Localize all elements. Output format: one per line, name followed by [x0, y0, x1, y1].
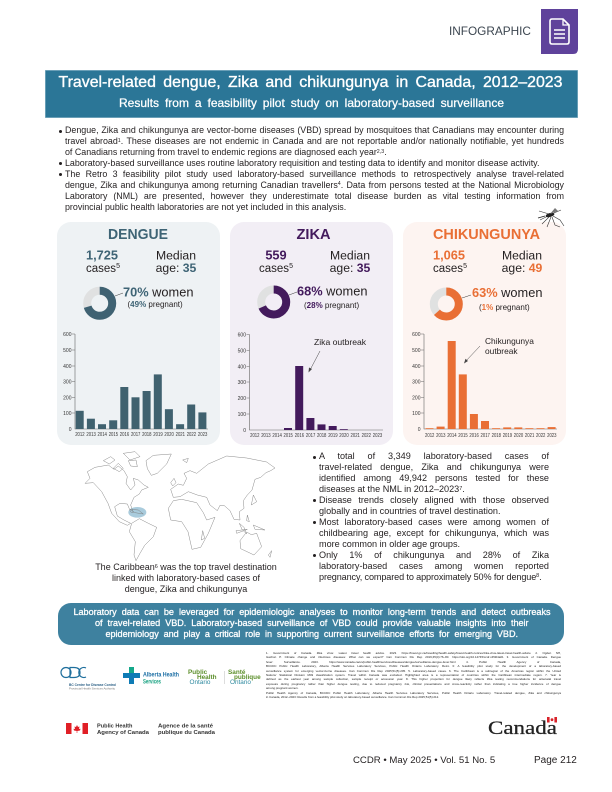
key findings bullet text: Only 1% of chikungunya and 28% of Zika: [319, 550, 549, 560]
logo: Public Health Ontario: Public: [188, 669, 208, 676]
dengue bar chart: 2017: [131, 432, 141, 438]
chikungunya bar chart: 0: [418, 427, 421, 433]
dengue case count: 1,725: [86, 248, 118, 262]
key findings bullet text: diseases at the NML in 2012–20237.: [319, 484, 465, 494]
dengue bar chart: 500: [63, 348, 72, 354]
references: [266, 651, 561, 699]
icon: mosquito: [538, 208, 564, 228]
publication footer: CCDR • May 2025 • Vol. 51 No. 5: [353, 755, 495, 766]
references: among pregnant women.: [266, 686, 298, 690]
annotation: zika outbreak: [308, 337, 367, 372]
zika bar chart: 2016: [295, 433, 304, 439]
introductory bullet text: of Canadians returning from travel to endemic regions are diagnosed each year2,3.: [65, 147, 387, 157]
dengue median age: age: 35: [156, 261, 197, 275]
chikungunya case count: 1,065: [433, 248, 465, 262]
chikungunya women share: 63% women: [472, 285, 542, 300]
zika bar chart: 500: [238, 348, 246, 354]
zika bar chart: 200: [238, 396, 246, 402]
panel: chikungunya: [403, 222, 566, 445]
logo: Public Health Ontario: Santé: [228, 669, 246, 676]
dengue bar chart: 2022: [187, 432, 196, 438]
zika bar chart: 2014: [272, 433, 282, 439]
caribbean highlight: [128, 507, 146, 518]
references: surveillance system for emerging vector-borne diseases. Can Commun Dis Rep 2025;51(5):205. 5. Laboratory-based cases. 6. The Caribbean is a subregion of the Americas region within the United: [266, 669, 561, 673]
dengue bar chart: 2020: [164, 432, 174, 438]
map caption: dengue, Zika and chikungunya: [125, 584, 247, 594]
zika case count: 5: [289, 263, 293, 270]
zika median age: age: 35: [330, 261, 371, 275]
zika case count: [259, 248, 293, 275]
dengue heading: DENGUE: [108, 226, 168, 243]
dengue women share: 70% women: [123, 284, 193, 300]
chikungunya bar chart: 2020: [514, 433, 523, 439]
chikungunya median age: [502, 248, 543, 275]
dengue median age: [156, 248, 197, 275]
dengue bar chart: 2023: [198, 432, 207, 438]
dengue bar chart: 200: [63, 396, 72, 402]
map caption: linked with laboratory-based cases of: [112, 573, 260, 583]
page number: Page 212: [534, 755, 577, 766]
logo: Public Health Ontario: Ontario: [190, 679, 211, 686]
dengue bar chart: 300: [63, 380, 72, 386]
chikungunya case count: [433, 248, 467, 275]
logo: Public Health Agency of Canada: Agence de la santé: [158, 724, 213, 730]
chikungunya heading: CHIKUNGUNYA: [433, 226, 540, 243]
logo: BC Centre for Disease Control: Provincial Health Services Authority: [69, 688, 116, 690]
dengue bar chart: 0: [69, 427, 72, 433]
key findings bullet text: identified among 49,942 persons tested for these: [319, 473, 549, 483]
dengue bar chart: 400: [63, 364, 72, 370]
zika bar chart: 2013: [261, 433, 271, 439]
conclusion banner: Laboratory data can be leveraged for epidemiologic analyses to monitor long-term trends and detect outbreaks: [74, 606, 550, 616]
references: fever: Surveillance. 2023. https://www.canada.ca/en/public-health/services/diseases/dengue/surveillance-dengue-fever.html 4. Public Health Agency of Canada,: [266, 660, 561, 664]
references: Nations' Statistical Division M49 classification system. Travel within Canada was excluded. Highlighted area is a representation of countries within the Caribbean intermediate region. 7. Year is: [266, 673, 561, 677]
key findings bullet text: pregnancy, compared to approximately 50% for dengue8.: [319, 572, 542, 582]
chikungunya bar chart: 2013: [436, 433, 446, 439]
introductory bullet text: dengue, Zika and chikungunya among returning Canadian travellers4. Data from persons tested at the National Microbiology: [65, 180, 564, 190]
annotation: chikungunya outbreak: [464, 336, 534, 364]
chikungunya bar chart: 400: [412, 364, 421, 370]
zika bar chart: 2012: [250, 433, 260, 439]
dengue case count: cases: [86, 263, 116, 275]
chikungunya bar chart: [412, 332, 557, 439]
logo: BC Centre for Disease Control: BC Centre for Disease Control: [69, 683, 116, 687]
dengue bar chart: 2013: [86, 432, 96, 438]
zika bar chart: 600: [238, 332, 246, 338]
zika median age: Median: [330, 248, 370, 262]
zika bar chart: 2017: [306, 433, 315, 439]
map caption: The Caribbean6 was the top travel destination: [95, 562, 277, 572]
chikungunya bar chart: 600: [412, 332, 421, 338]
conclusion banner: of travel-related VBD. Laboratory-based surveillance of VBD could provide valuable insights into their: [95, 618, 528, 628]
dengue median age: Median: [156, 248, 196, 262]
dengue bar chart: 600: [63, 332, 72, 338]
key findings bullet text: travel-related dengue, Zika and chikungunya were: [319, 462, 549, 472]
chikungunya bar chart: 2015: [458, 433, 468, 439]
introductory bullet text: Laboratory-based surveillance uses routine laboratory requisition and testing data to identify and monitor disease activity.: [65, 158, 539, 168]
references: Public Health Agency of Canada, BCCDC Public Health Laboratory, Alberta Health Services Laboratory Services, Public Health Ontario Laboratory. Travel-related dengue, Zika and chikungunya: [266, 691, 561, 695]
zika bar chart: 300: [238, 380, 246, 386]
logo: Public Health Agency of Canada: publique du Canada: [158, 730, 216, 736]
label: infographic: INFOGRAPHIC: [449, 24, 531, 38]
icon: document tab: [541, 9, 578, 54]
key findings bullet text: globally and in countries of travel destination.: [319, 506, 500, 516]
chikungunya women share: (1% pregnant): [479, 303, 530, 312]
references: BCCDC Public Health Laboratory, Alberta Health Services Laboratory Services, Public Health Ontario Laboratory. Retro 3: A feasibility pilot study for the development of a laboratory-based: [266, 664, 561, 668]
key findings bullet text: Disease trends closely aligned with those observed: [319, 495, 549, 505]
zika case count: 559: [265, 248, 287, 262]
dengue women share: [123, 284, 193, 309]
annotation: chikungunya outbreak: Chikungunya: [485, 336, 534, 346]
key findings bullet text: laboratory-based cases among women reported: [319, 560, 549, 570]
logo: Public Health Ontario: Ontario: [230, 679, 251, 686]
zika bar chart: 2023: [373, 433, 382, 439]
dengue bar chart: 100: [63, 411, 72, 417]
key findings bullet text: childbearing age, except for chikungunya, which was: [319, 528, 549, 538]
zika donut: 68% women: [261, 290, 297, 314]
chikungunya bar chart: 2017: [480, 433, 490, 439]
chikungunya median age: Median: [502, 248, 542, 262]
panel: zika: [230, 222, 393, 445]
introductory bullet text: The Retro 3 feasibility pilot study used laboratory-based surveillance methods to retrospectively analyse travel-related: [65, 168, 564, 178]
chikungunya donut: 63% women: [434, 292, 471, 316]
logo: Public Health Agency of Canada: Agency of Canada: [97, 730, 150, 736]
chikungunya bar chart: 100: [412, 411, 421, 417]
chikungunya bar chart: 2021: [525, 433, 534, 439]
Canada wordmark: Canada: [488, 718, 558, 739]
logo: Alberta Health Services: Services: [143, 678, 161, 686]
map caption: [95, 562, 277, 594]
chikungunya bar chart: 500: [412, 348, 421, 354]
continents: [85, 452, 275, 561]
annotation: chikungunya outbreak: outbreak: [485, 346, 518, 356]
chikungunya bar chart: 200: [412, 396, 421, 402]
chikungunya bar chart: 300: [412, 380, 421, 386]
key findings bullet text: [313, 451, 550, 582]
chikungunya case count: cases: [433, 263, 463, 275]
dengue bar chart: 2015: [109, 432, 118, 438]
introductory bullet text: Dengue, Zika and chikungunya are vector-borne diseases (VBD) spread by mosquitoes that Canadians may encounter during: [65, 125, 564, 135]
zika bar chart: 2018: [317, 433, 327, 439]
zika bar chart: 2022: [362, 433, 371, 439]
zika women share: (28% pregnant): [304, 301, 359, 310]
key findings bullet text: A total of 3,349 laboratory-based cases of: [319, 451, 549, 461]
dengue case count: 5: [116, 263, 120, 270]
zika median age: [330, 248, 371, 275]
dengue bar chart: [63, 332, 208, 438]
logo: Public Health Ontario: publique: [234, 674, 261, 681]
conclusion banner: epidemiology and play a critical role in supporting current surveillance efforts for emerging VBD.: [106, 628, 518, 638]
references: defined as the earliest year among sample collection, sample receipt or accession year. 8. This higher proportion for dengue likely reflects Zika testing recommendations for antenatal travel: [266, 677, 561, 681]
references: Gachon P. Climate change and infectious diseases: What can we expect? Can Commun Dis Rep 2019;45(4):76–80. https://doi.org/10.14745/ccdr.v45i04a01 3. Government of Canada. Dengue: [266, 655, 561, 659]
references: exposure during pregnancy rather than higher dengue testing, due to reduced pregnancy risk, clinical presentations and cross-reactivity rather than indicating a true higher incidence of dengue: [266, 682, 561, 686]
zika bar chart: 100: [238, 412, 246, 418]
world map with Caribbean highlighted: [84, 451, 275, 561]
zika bar chart: 400: [238, 364, 246, 370]
key findings bullet text: more common in older age groups.: [319, 538, 460, 548]
chikungunya bar chart: 2018: [492, 433, 501, 439]
introductory bullet text: [59, 125, 564, 212]
dengue donut: 70% women: [87, 291, 123, 316]
zika bar chart: 2015: [284, 433, 293, 439]
chikungunya median age: age: 49: [502, 261, 543, 275]
introductory bullet text: travel abroad1. These diseases are not endemic in Canada and are not reportable and/or nationally notifiable, yet hundreds: [65, 136, 564, 146]
chikungunya bar chart: 2012: [425, 433, 435, 439]
chikungunya women share: [472, 285, 542, 312]
logo: Alberta Health Services: Alberta Health: [143, 672, 179, 678]
introductory bullet text: Laboratory (NML) are presented, however they underestimate total disease burden as vital testing information from: [65, 190, 564, 200]
zika bar chart: [238, 332, 383, 439]
zika bar chart: 0: [243, 428, 246, 434]
dengue bar chart: 2016: [120, 432, 129, 438]
panel: dengue: [57, 222, 220, 445]
subtitle: Results from a feasibility pilot study on laboratory-based surveillance: [119, 96, 504, 110]
dengue bar chart: 2021: [176, 432, 185, 438]
dengue bar chart: 2019: [153, 432, 163, 438]
chikungunya bar chart: 2022: [536, 433, 546, 439]
dengue case count: [86, 248, 120, 275]
conclusion banner: [58, 603, 564, 644]
logo: Public Health Agency of Canada: [66, 723, 216, 736]
title: Travel-related dengue, Zika and chikungunya in Canada, 2012–2023: [58, 74, 562, 90]
zika women share: [297, 284, 367, 310]
logo: Public Health Ontario: Health: [197, 674, 217, 681]
logo: Public Health Agency of Canada: Public Health: [97, 724, 133, 730]
annotation: zika outbreak: Zika outbreak: [314, 337, 367, 347]
zika bar chart: 2019: [328, 433, 338, 439]
dengue bar chart: 2014: [98, 432, 107, 438]
chikungunya case count: 5: [463, 263, 467, 270]
chikungunya bar chart: 2023: [547, 433, 557, 439]
key findings bullet text: Most laboratory-based cases were among women of: [319, 517, 549, 527]
chikungunya bar chart: 2014: [447, 433, 457, 439]
zika heading: ZIKA: [296, 226, 331, 243]
chikungunya bar chart: 2016: [469, 433, 479, 439]
references: in Canada, 2012–2023: Results from a feasibility pilot study on laboratory-based surveillance. Can Commun Dis Rep 2025;51(5):212.: [266, 695, 439, 699]
zika bar chart: 2021: [350, 433, 360, 439]
dengue women share: (49% pregnant): [128, 300, 183, 309]
logo: Alberta Health Services: [123, 667, 179, 686]
logo: Public Health Ontario: [188, 669, 261, 686]
zika case count: cases: [259, 263, 289, 275]
zika women share: 68% women: [297, 284, 367, 298]
title banner: [44, 70, 578, 118]
dengue bar chart: 2012: [75, 432, 85, 438]
logo: BC Centre for Disease Control: [60, 666, 116, 690]
references: 1. Government of Canada. Zika virus: Latest travel health advice. 2023. https://travel.gc.ca/travelling/health-safety/travel-health-notices/zika-virus-latest-travel-health-advice 2. Ogden NH,: [266, 651, 561, 655]
introductory bullet text: provincial public health laboratories are not yet included in this analysis.: [65, 202, 346, 212]
dengue bar chart: 2018: [142, 432, 152, 438]
chikungunya bar chart: 2019: [503, 433, 512, 439]
zika bar chart: 2020: [339, 433, 349, 439]
